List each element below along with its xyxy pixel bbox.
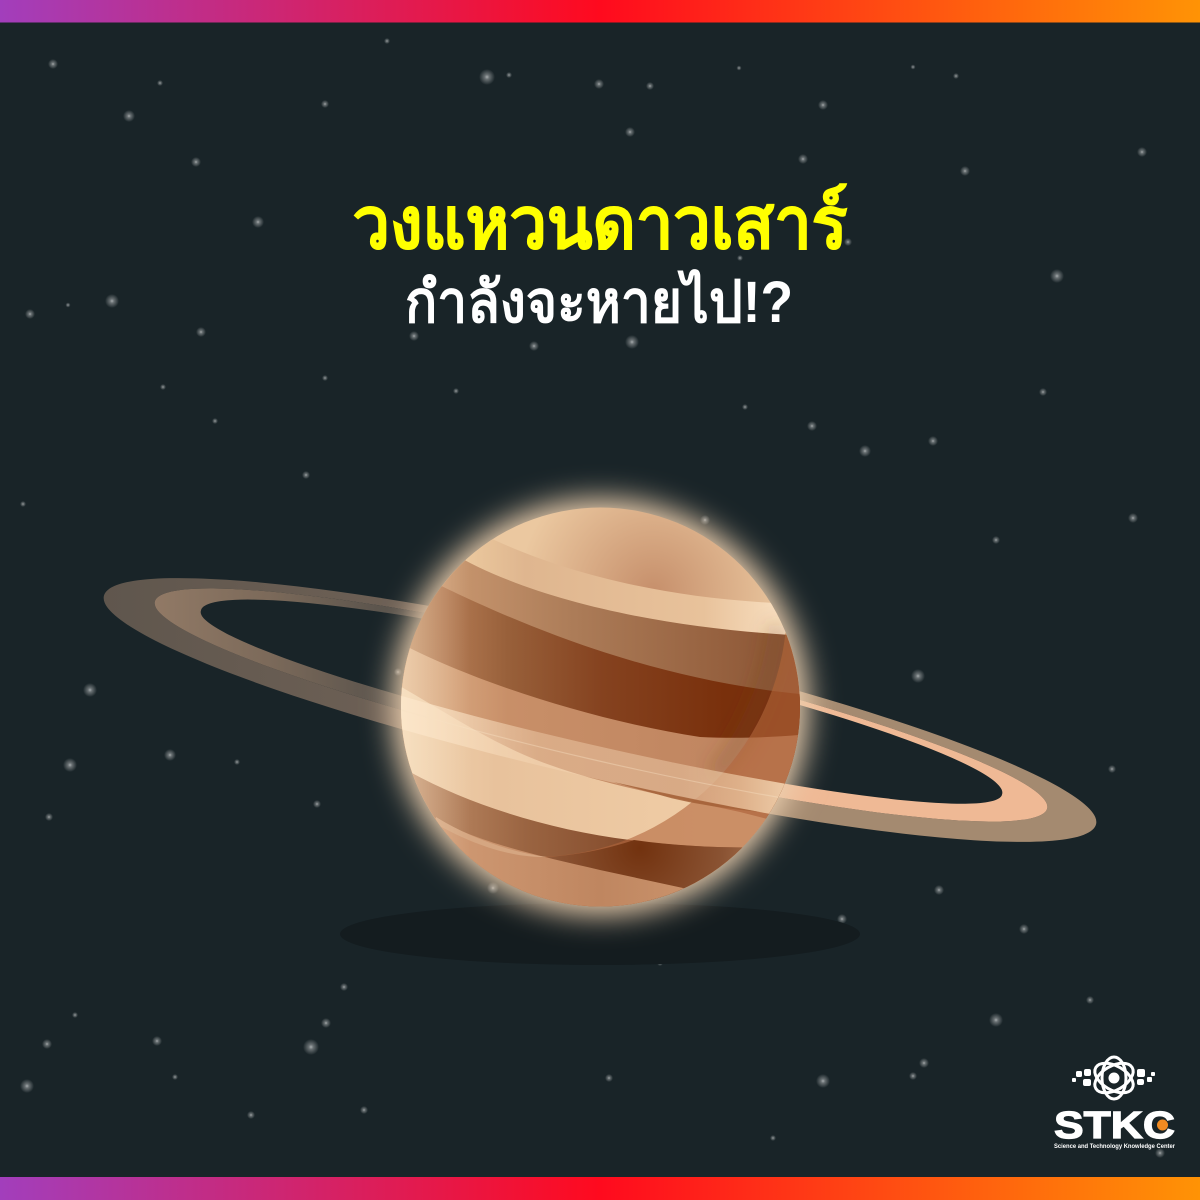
crescent edge shading [715, 625, 778, 775]
planet ground shadow [340, 903, 860, 965]
logo orange dot [1157, 1120, 1168, 1130]
logo wordmark: STKC [1054, 1105, 1175, 1147]
planet body [401, 508, 800, 906]
front ring over planet [401, 696, 785, 814]
thin pale wedge [436, 817, 547, 857]
saturn illustration [104, 474, 1096, 940]
band: pale upper stripe [443, 540, 800, 690]
bottom cap [434, 818, 684, 906]
lower band shadow patch [548, 840, 742, 901]
logo tagline: Science and Technology Knowledge Center [1054, 1144, 1176, 1150]
back ring: outer band [104, 578, 1096, 842]
icon: atom network [1090, 1057, 1138, 1099]
band: medium tan [402, 648, 798, 819]
STKC logo [1054, 1057, 1176, 1150]
band: mid brown [413, 560, 800, 835]
band: dark brown [404, 586, 800, 883]
ring shadow wedge [613, 782, 760, 812]
icon: data dots [1072, 1069, 1155, 1086]
top gradient bar [0, 0, 1200, 22]
back ring: inner band [155, 589, 1047, 821]
title: yellow heading: วงแหวนดาวเสาร์ [352, 183, 848, 264]
left rim light [402, 570, 459, 844]
right crescent shade [464, 632, 800, 858]
planet glow [392, 499, 808, 915]
bottom gradient bar [0, 1177, 1200, 1200]
band: pale lower stripe [401, 688, 766, 906]
ring divider line [475, 730, 778, 798]
band: lower dark stripe [412, 774, 742, 906]
subtitle: white heading: กำลังจะหายไป!? [405, 269, 793, 335]
